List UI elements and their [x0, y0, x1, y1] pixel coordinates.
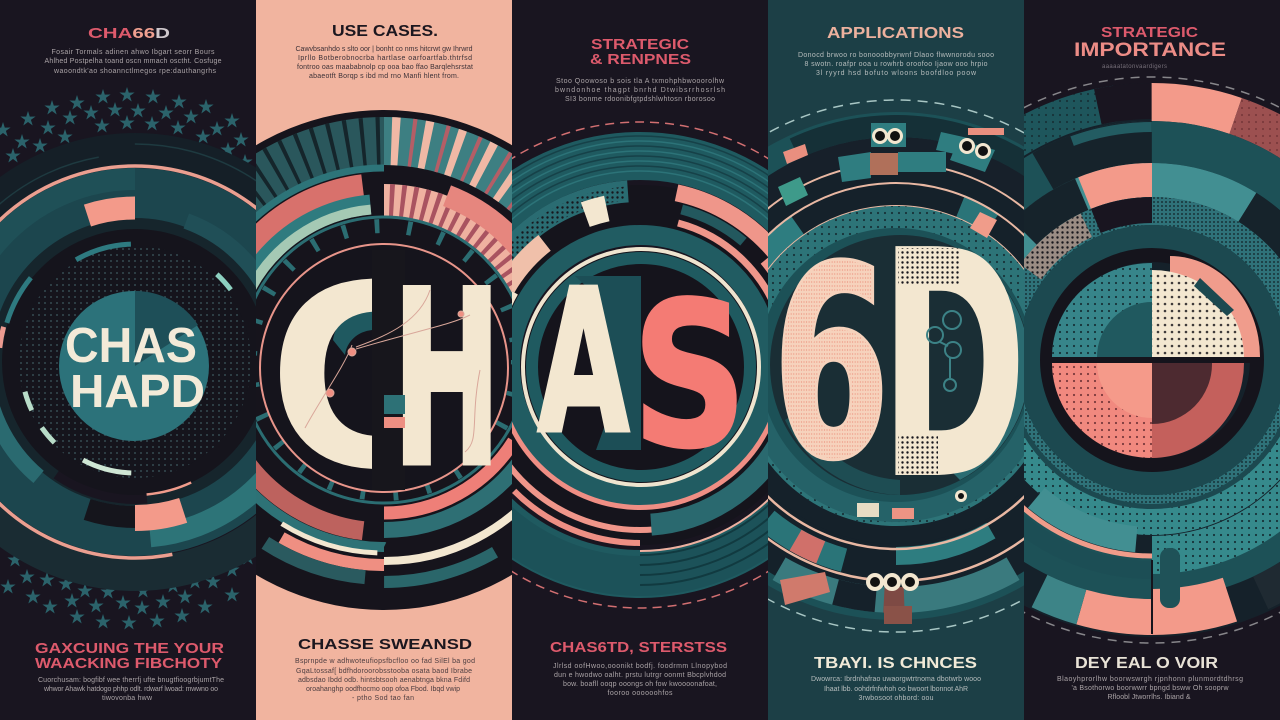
letter: D: D	[879, 185, 1028, 550]
patch: rust texture	[870, 153, 898, 175]
half disc: lower left salmon	[1052, 363, 1152, 458]
text block: bottom: oroahanghp oodfhocmo oop ofoa Fbod. Ibqd vwip	[306, 686, 460, 693]
chart: concentric rings	[0, 133, 256, 591]
half disc: upper right dots	[1152, 270, 1244, 357]
block: teal letter shade	[575, 276, 641, 450]
text block: intro: waoondtk'ao shoannctlmegos rpe:dauthangrhs	[53, 68, 216, 75]
panel: APPLICATIONS	[630, 0, 1162, 720]
heading: strategic	[590, 39, 690, 64]
heading: bottom	[35, 643, 224, 668]
half disc: upper right salmon	[1170, 256, 1260, 357]
chart: collage rings	[630, 100, 1162, 632]
heading: strategic: & RENPNES	[590, 52, 691, 68]
text block: bottom: Dwowrca: Ibrdnhafrao uwaorgwtrtnoma dbotwrb wooo	[811, 676, 981, 683]
disc shade	[135, 291, 198, 366]
letter: C: C	[270, 226, 475, 522]
patch: rust block	[884, 606, 912, 624]
text block: bottom: whwor Ahawk hatdogo phhp odlt. rdwarf lwoad: mwwno oo	[43, 686, 218, 693]
text block: bottom: bow. boafll ooqp ooongs oh fow kwoooonafoat,	[563, 681, 717, 688]
panel: STRATEGIC IMPORTANCE	[869, 0, 1280, 720]
arc: pink outline	[0, 164, 256, 560]
heading: bottom: CHASSE SWEANSD	[298, 636, 472, 653]
bar: lower teal pill	[1160, 548, 1180, 608]
text block: bottom: fooroo oooooohfos	[608, 690, 673, 697]
letter: H: H	[393, 242, 501, 519]
text block: bottom	[38, 677, 224, 702]
patch: mint block	[778, 177, 808, 206]
heading: strategic: STRATEGIC	[591, 37, 690, 53]
heading: strategic importance: STRATEGIC	[1101, 24, 1198, 41]
stripes: top left dark	[256, 117, 380, 206]
text block: bottom	[295, 658, 475, 702]
text block: intro: Cawvbsanhdo s slto oor | bonht co nms hitcrwt gw Ihrwrd	[296, 46, 473, 53]
bar: salmon bottom	[135, 498, 188, 531]
heading: APPLICATIONS: APPLICATIONS	[827, 25, 964, 42]
patch: salmon label	[968, 128, 1004, 135]
text block: caption: aaaaatatonvaardigers	[1102, 64, 1167, 70]
half disc: lower right	[1152, 363, 1244, 458]
ring: teal right	[935, 250, 1029, 480]
half disc: lower left dots	[1052, 363, 1152, 458]
text block: intro: 3l ryyrd hsd bofuto wloons boofdloo poow	[816, 70, 977, 77]
band: teal on cream	[1194, 278, 1234, 316]
half disc: upper left inner	[1097, 302, 1152, 357]
panel: STRATEGIC RENPNES	[512, 39, 768, 695]
heading: CHA66D: CHA 66 D	[88, 25, 170, 42]
icon: molecule nodes	[927, 311, 961, 391]
chart: concentric rings	[256, 110, 512, 610]
text block: bottom	[1057, 676, 1243, 701]
heading: bottom: WAACKING FIBCHOTY	[35, 655, 222, 672]
text block: intro: abaeotft Borqp s ibd md rno Manfi hlent from.	[309, 73, 459, 80]
block: salmon patch	[384, 417, 405, 428]
text block: bottom	[553, 663, 727, 697]
text block: intro	[44, 49, 222, 75]
ring: teal inner	[532, 258, 750, 476]
half disc: lower left inner	[1097, 363, 1152, 418]
text block: intro	[555, 78, 725, 103]
text block: intro: Ahlhed Postpelha toand oscn mmach osctht. Cosfuge	[44, 58, 222, 65]
text block: intro: 8 swotn. roafpr ooa u rowhrb oroofoo Ijaow ooo hrpio	[804, 61, 988, 68]
patch: salmon lower	[780, 572, 830, 605]
icon: wires and nodes	[305, 290, 480, 452]
text block: intro	[798, 52, 994, 77]
letter: A: A	[538, 249, 629, 477]
text block: bottom: adbsdao Ibdd odb. hintsbtsooh aenabtnga bkna Fdifd	[298, 677, 470, 684]
letter: S: S	[632, 259, 747, 492]
heading: bottom: GAXCUING THE YOUR	[35, 640, 224, 657]
half disc: lower right inner	[1152, 363, 1212, 424]
block: teal patch	[384, 395, 405, 414]
half disc: upper right cream	[1152, 270, 1244, 357]
text block: intro: fontroo oas maababnolp cp ooa bao ffao Barqlehsrstat	[297, 64, 473, 71]
heading: strategic importance: IMPORTANCE	[1074, 40, 1226, 61]
panel: CHA66D	[0, 28, 256, 700]
heading: bottom: CHAS6TD, STERSTSS	[550, 639, 727, 656]
disc: letter backdrop	[260, 244, 508, 492]
text block: intro: Fosair Tormals adinen ahwo Ibgart seorr Bours	[52, 49, 215, 56]
title: CHAS HAPD	[66, 328, 204, 408]
icon: star field	[0, 87, 256, 630]
heading: USE CASES: USE CASES.	[332, 23, 438, 40]
text block: bottom: tiwovonba hww	[102, 695, 153, 702]
heading: bottom: DEY EAL O VOIR	[1075, 655, 1218, 672]
half disc: upper left teal	[1052, 263, 1152, 357]
chart: concentric rings	[512, 121, 768, 609]
panel: USE CASES	[256, 0, 512, 720]
text block: intro	[296, 46, 473, 80]
arc: cream inner	[523, 249, 759, 485]
ring: teal lower	[785, 410, 900, 495]
icon: eyes bottom	[857, 490, 967, 591]
texture: D dots	[898, 248, 960, 284]
heading: bottom: TBAYI. IS CHNCES	[814, 655, 977, 672]
text block: bottom: Blaoyhprorlhw boorwswrgh rjpnhonn plunmordtdhrsg	[1057, 676, 1243, 683]
chart: concentric rings	[869, 77, 1280, 643]
text block: bottom: Cuorchusam: bogfibf wee therrfj ufte bnugtfioogrbjumtThe	[38, 677, 224, 684]
text block: bottom: 3rwbosoot ohbord: oou	[858, 695, 934, 702]
text block: bottom: Bsprnpde w adhwoteufiopsfbcfloo oo fad SilEl ba god	[295, 658, 475, 665]
bar: salmon top	[84, 196, 135, 226]
stripes: top right colours	[384, 117, 512, 293]
text block: bottom	[811, 676, 981, 702]
divider: center bar	[1052, 357, 1260, 363]
text block: bottom: Jlrlsd oofHwoo,ooonikt bodfj. foodrmm Llnopybod	[553, 663, 727, 670]
title: CHAS HAPD: CHAS	[65, 319, 197, 373]
half disc: upper left dots	[1052, 263, 1152, 357]
text block: bottom: - ptho Sod tao fan	[352, 695, 414, 702]
rule: center vertical	[1151, 560, 1153, 634]
text block: intro: Stoo Qoowoso b sois tla A txmohphbwooorolhw	[556, 78, 725, 85]
disc: letter backdrop	[770, 235, 1030, 495]
title: CHAS HAPD: HAPD	[70, 365, 205, 417]
patch: teal collage blocks	[838, 123, 995, 182]
text block: bottom: Rfloobl Jtworrlhs. Ibiand &	[1108, 694, 1191, 701]
letter: 6: 6	[772, 209, 890, 519]
patch: dotted salmon	[970, 212, 997, 238]
text block: bottom: GqaLtossaf[ bdfhdoroorobsstooba osata baod Ibrabe	[296, 668, 472, 675]
patch: salmon tag	[892, 508, 914, 519]
text block: bottom: 'a Bsothorwo boorwwrr bpngd bsww Oh sooprw	[1072, 685, 1229, 692]
texture: D lower dots	[898, 435, 938, 476]
patch: salmon block left	[783, 144, 808, 164]
text block: intro: Iprllo Botberobnocrba hartlase oarfoartfab.thtrfsd	[298, 55, 472, 62]
text block: bottom: Ihaat lbb. oohdrfnfwhoh oo bwoort lbonnot AhR	[824, 686, 968, 693]
shape: teal behind C	[333, 312, 372, 355]
disc: center	[59, 291, 209, 441]
icon: eyes top	[872, 128, 991, 159]
text block: intro: bwndonhoe thagpt bnrhd Dtwibsrrhosrlsh	[555, 87, 725, 94]
text block: bottom: dun e hwodwo oalht. prstu lutrgr oonmt Bbcplvhdod	[554, 672, 726, 679]
heading: strategic importance	[1074, 24, 1226, 61]
strip: center column	[400, 489, 405, 490]
text block: intro: Donocd brwoo ro bonooobbyrwnf Dlaoo flwwnorodu sooo	[798, 52, 994, 59]
text block: intro: SI3 bonme rdoonibfgtpdshlwhtosn rborosoo	[565, 96, 715, 103]
